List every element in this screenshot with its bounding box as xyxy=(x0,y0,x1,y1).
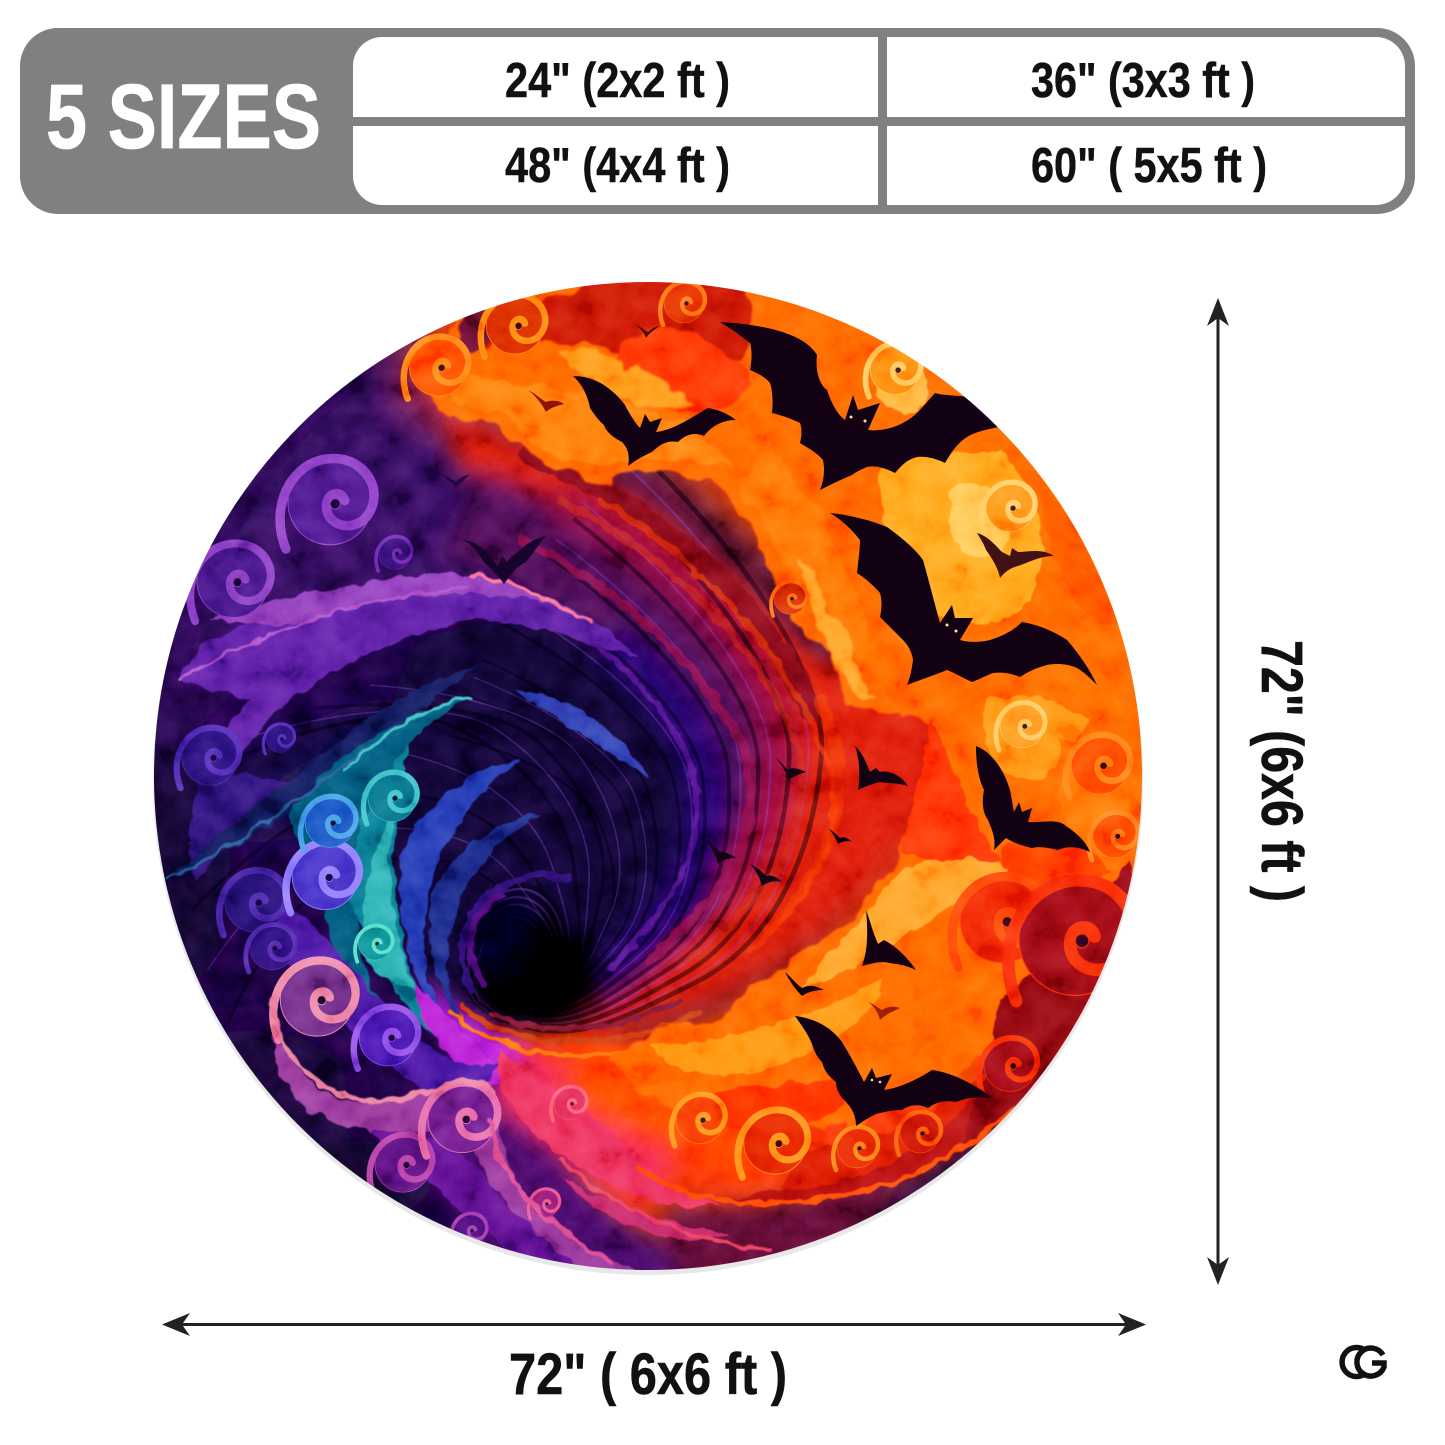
rug rim xyxy=(153,285,1143,1275)
brand logo xyxy=(1342,1348,1384,1376)
heading: 5 sizes: 5 SIZES xyxy=(46,66,321,168)
small bats in the vortex xyxy=(440,324,916,1020)
orange curls xyxy=(404,282,1138,1177)
flame mass xyxy=(400,262,1170,1130)
bat: purple area xyxy=(464,536,546,584)
width arrow xyxy=(162,1313,1146,1336)
width label: 72" ( 6x6 ft ) xyxy=(509,1342,787,1407)
bat: large top xyxy=(720,322,998,490)
bat: right xyxy=(976,746,1090,852)
soft colour fields xyxy=(154,320,1000,1258)
blue and teal curls xyxy=(286,772,417,962)
size 60 inch: 60" ( 5x5 ft ) xyxy=(1031,139,1267,193)
height arrow xyxy=(1207,298,1229,1285)
table horizontal divider xyxy=(353,117,1405,126)
pink curls xyxy=(273,960,587,1219)
header size table xyxy=(20,28,1415,214)
bats xyxy=(440,322,1097,1126)
bat eyes xyxy=(850,416,958,1083)
vortex ring ridges xyxy=(450,876,720,1056)
height label: 72" (6x6 ft ) xyxy=(1249,640,1314,902)
bat: upper left xyxy=(573,376,736,466)
yellow clouds and red waves xyxy=(650,355,1134,1203)
size table panel xyxy=(353,37,1405,205)
round rug artwork xyxy=(130,262,1170,1290)
bat: large middle xyxy=(830,513,1097,685)
bottom purple-to-red sweep xyxy=(400,985,960,1290)
bat: small brown xyxy=(977,533,1054,578)
bat: bottom xyxy=(795,1016,992,1126)
vortex wall fields xyxy=(380,410,951,1040)
vortex centre xyxy=(469,895,601,1029)
pink stream lines xyxy=(168,575,1090,1262)
yellow curls xyxy=(866,343,1045,750)
table vertical divider xyxy=(878,37,887,205)
texture overlay xyxy=(140,270,1160,1290)
header background bar xyxy=(20,28,1415,214)
purple, teal and blue waves xyxy=(168,574,730,1275)
red wall streaks xyxy=(480,455,838,970)
size 24 inch: 24" (2x2 ft ) xyxy=(505,54,730,108)
size 36 inch: 36" (3x3 ft ) xyxy=(1031,54,1255,108)
wave curls xyxy=(177,282,1138,1248)
purple curls xyxy=(177,458,487,1248)
red curls xyxy=(952,876,1134,1094)
spiral ridges xyxy=(191,470,824,1034)
size 48 inch: 48" (4x4 ft ) xyxy=(505,139,730,193)
